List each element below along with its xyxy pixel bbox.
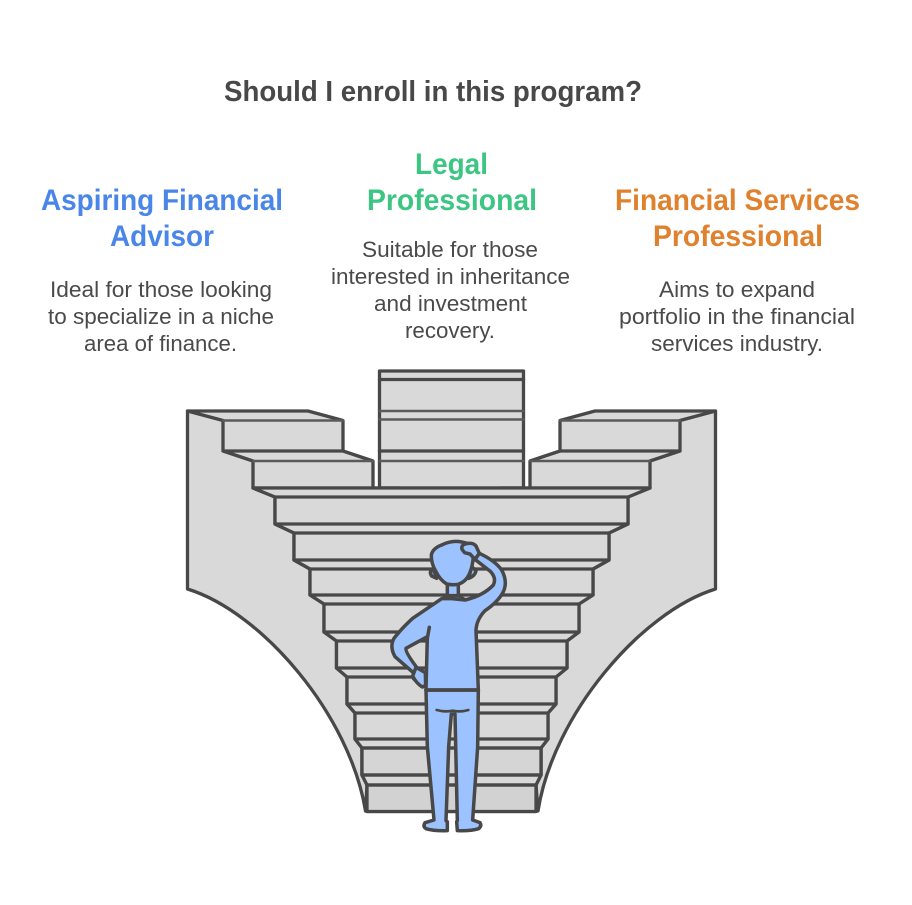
- panel: aspiring financial advisor: [41, 184, 283, 356]
- text: legal description: [331, 237, 570, 343]
- heading: aspiring financial advisor: [41, 184, 283, 253]
- heading: legal professional: [367, 148, 537, 217]
- heading: legal professional: Professional: [367, 184, 537, 217]
- text: financial services description: [619, 277, 855, 356]
- belt line: [426, 685, 478, 695]
- heading: aspiring financial advisor: Advisor: [110, 220, 214, 253]
- text: advisor description: Ideal for those looking: [50, 277, 272, 302]
- neck: [447, 583, 458, 596]
- text: legal description: Suitable for those: [362, 237, 538, 262]
- text: advisor description: area of finance.: [84, 331, 237, 356]
- torso and arms: [392, 553, 505, 690]
- left staircase: [188, 411, 400, 811]
- text: legal description: interested in inheritance: [331, 264, 570, 289]
- text: legal description: recovery.: [405, 318, 495, 343]
- heading: financial services professional: [615, 184, 860, 253]
- text: financial services description: portfolio in the financial: [619, 304, 855, 329]
- text: advisor description: [48, 277, 274, 356]
- text: legal description: and investment: [374, 291, 528, 316]
- legs and feet: [424, 690, 481, 831]
- heading: financial services professional: Professional: [653, 220, 823, 253]
- text: financial services description: services industry.: [651, 331, 823, 356]
- text: advisor description: to specialize in a niche: [48, 304, 274, 329]
- arm crease: [427, 627, 429, 638]
- collar: [442, 596, 467, 600]
- staircase illustration: [188, 371, 716, 812]
- heading: aspiring financial advisor: Aspiring Financial: [41, 184, 283, 217]
- hand at hip: [413, 667, 426, 687]
- panel: financial services professional: [615, 184, 860, 356]
- figure: person scratching head: [392, 541, 505, 831]
- center staircase: [380, 371, 524, 488]
- hand on head: [462, 543, 479, 559]
- text: financial services description: Aims to expand: [659, 277, 815, 302]
- title: Should I enroll in this program?: [224, 76, 642, 108]
- head: [431, 541, 473, 585]
- lower central steps: [253, 488, 650, 812]
- panel: legal professional: [331, 148, 570, 343]
- heading: financial services professional: Financial Services: [615, 184, 860, 217]
- heading: legal professional: Legal: [415, 148, 488, 181]
- right staircase: [500, 411, 716, 811]
- ears: [430, 568, 437, 578]
